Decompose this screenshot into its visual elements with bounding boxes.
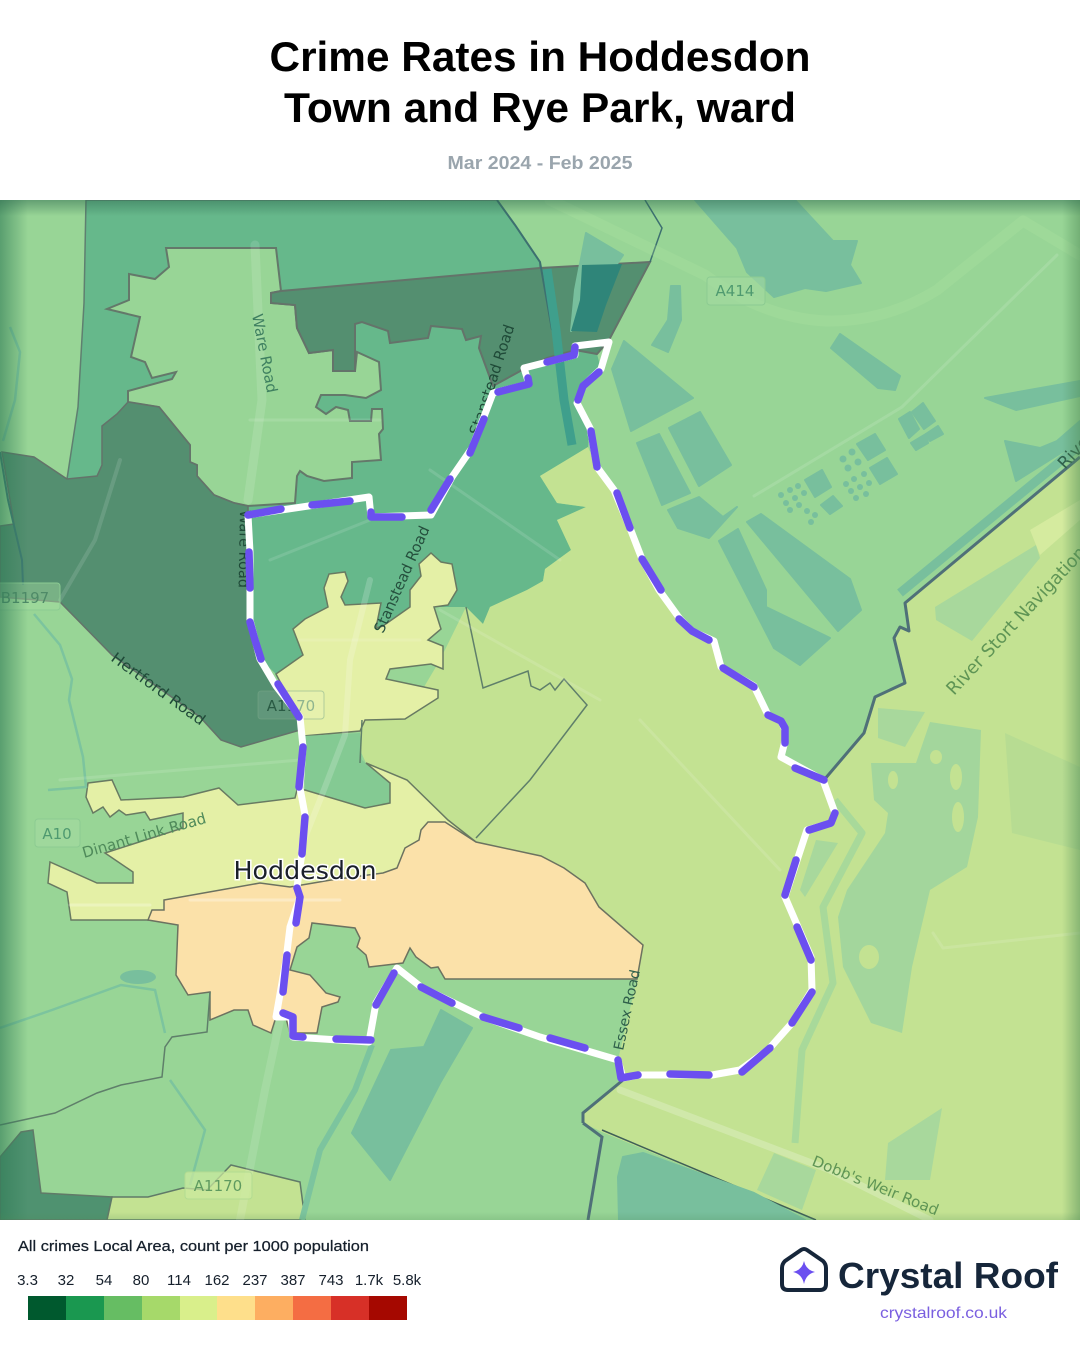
legend values: 54 [96,1272,112,1289]
label: Essex Road: Essex Road [611,968,644,1052]
legend values [17,1272,422,1289]
legend values: 1.7k [355,1272,384,1289]
road shields [0,277,765,1199]
area: block south of town [303,733,390,808]
area: southern light block [107,1165,305,1220]
water: streams in the west [0,327,205,1185]
area: Hoddesdon pale [48,763,476,920]
legend [17,1238,422,1320]
legend values: 387 [280,1272,306,1289]
east subtle field [1005,733,1074,848]
subtitle: date range: Mar 2024 - Feb 2025 [448,153,632,173]
shield: A414 [707,277,765,305]
road labels [80,312,1080,1219]
label: Hoddesdon town name: Hoddesdon [234,856,376,885]
legend values: 237 [242,1272,268,1289]
water: southern canal [302,1045,372,1220]
shield: A1170 south: A1170 [194,1177,242,1195]
logo: Crystal Roof [782,1249,1059,1322]
legend values: 32 [58,1272,74,1289]
water: lake on eastern side [838,722,981,1033]
legend values: 743 [318,1272,344,1289]
website: crystalroof.co.uk [880,1305,1008,1322]
icon: house with star [782,1249,826,1290]
boundary lines [0,200,816,1220]
lake islands [859,750,964,969]
label: Ware Road north: Ware Road [248,312,281,394]
area: northern dark green [271,262,650,386]
water: band along eastern boundary [900,445,1080,593]
water: pond west of town [120,970,156,984]
legend colour scale [28,1296,407,1320]
map edge vignette [0,200,1080,1220]
map base: low crime light green [0,200,1080,1220]
area: western dark green [0,402,300,747]
area: south-west dark corner [0,1130,112,1220]
outline: eastern boundary river [824,457,1080,780]
shield: B1197: B1197 [1,589,49,607]
legend values: 3.3 [17,1272,38,1289]
area: eastern and ward light yellow-green [360,447,1080,1220]
water: eastern blocks [757,545,1040,1210]
area: central ward green [248,352,600,674]
legend values: 162 [204,1272,230,1289]
wordmark: Crystal Roof [838,1255,1059,1296]
boundary purple dashes [248,347,835,1078]
label: Ware Road south: Ware Road [235,510,254,588]
legend values: 114 [167,1272,191,1289]
water: river loop [795,800,862,1143]
roads [60,200,1080,1220]
title [270,33,810,131]
boundary white base [248,342,835,1078]
title: Crime Rates in Hoddesdon [270,33,810,80]
shield: A1170 south [185,1172,252,1199]
legend values: 5.8k [393,1272,422,1289]
shield: B1197 [0,583,60,610]
shield: A10 [35,819,80,847]
label: Stanstead Road south: Stanstead Road [370,523,433,636]
area: Hoddesdon orange [148,822,643,1033]
title: Town and Rye Park, ward [284,84,796,131]
water: lakes and reservoirs [352,200,1080,1220]
water: dark pond on northern area [571,264,622,332]
ward boundary: dashed purple and white [248,342,835,1078]
shield: A414: A414 [716,282,754,300]
area: town pale [276,553,457,736]
shield: A10: A10 [42,825,72,843]
water: canal [547,269,572,445]
label: Hertford Road: Hertford Road [108,649,209,729]
label: Dobb's Weir Road: Dobb's Weir Road [810,1152,941,1219]
label: Dinant Link Road: Dinant Link Road [80,809,208,862]
railway strip [1030,500,1080,555]
area: Ware Road light green [107,248,383,506]
area: upper left green [66,200,540,478]
label: Stanstead Road north: Stanstead Road [466,322,518,437]
map [0,200,1080,1220]
water: treatment works filter beds [778,448,872,525]
legend values: 80 [133,1272,149,1289]
shield: A1170 north [258,691,324,719]
shield: A1170 north: A1170 [267,697,315,715]
legend title: All crimes Local Area, count per 1000 population [18,1238,369,1255]
